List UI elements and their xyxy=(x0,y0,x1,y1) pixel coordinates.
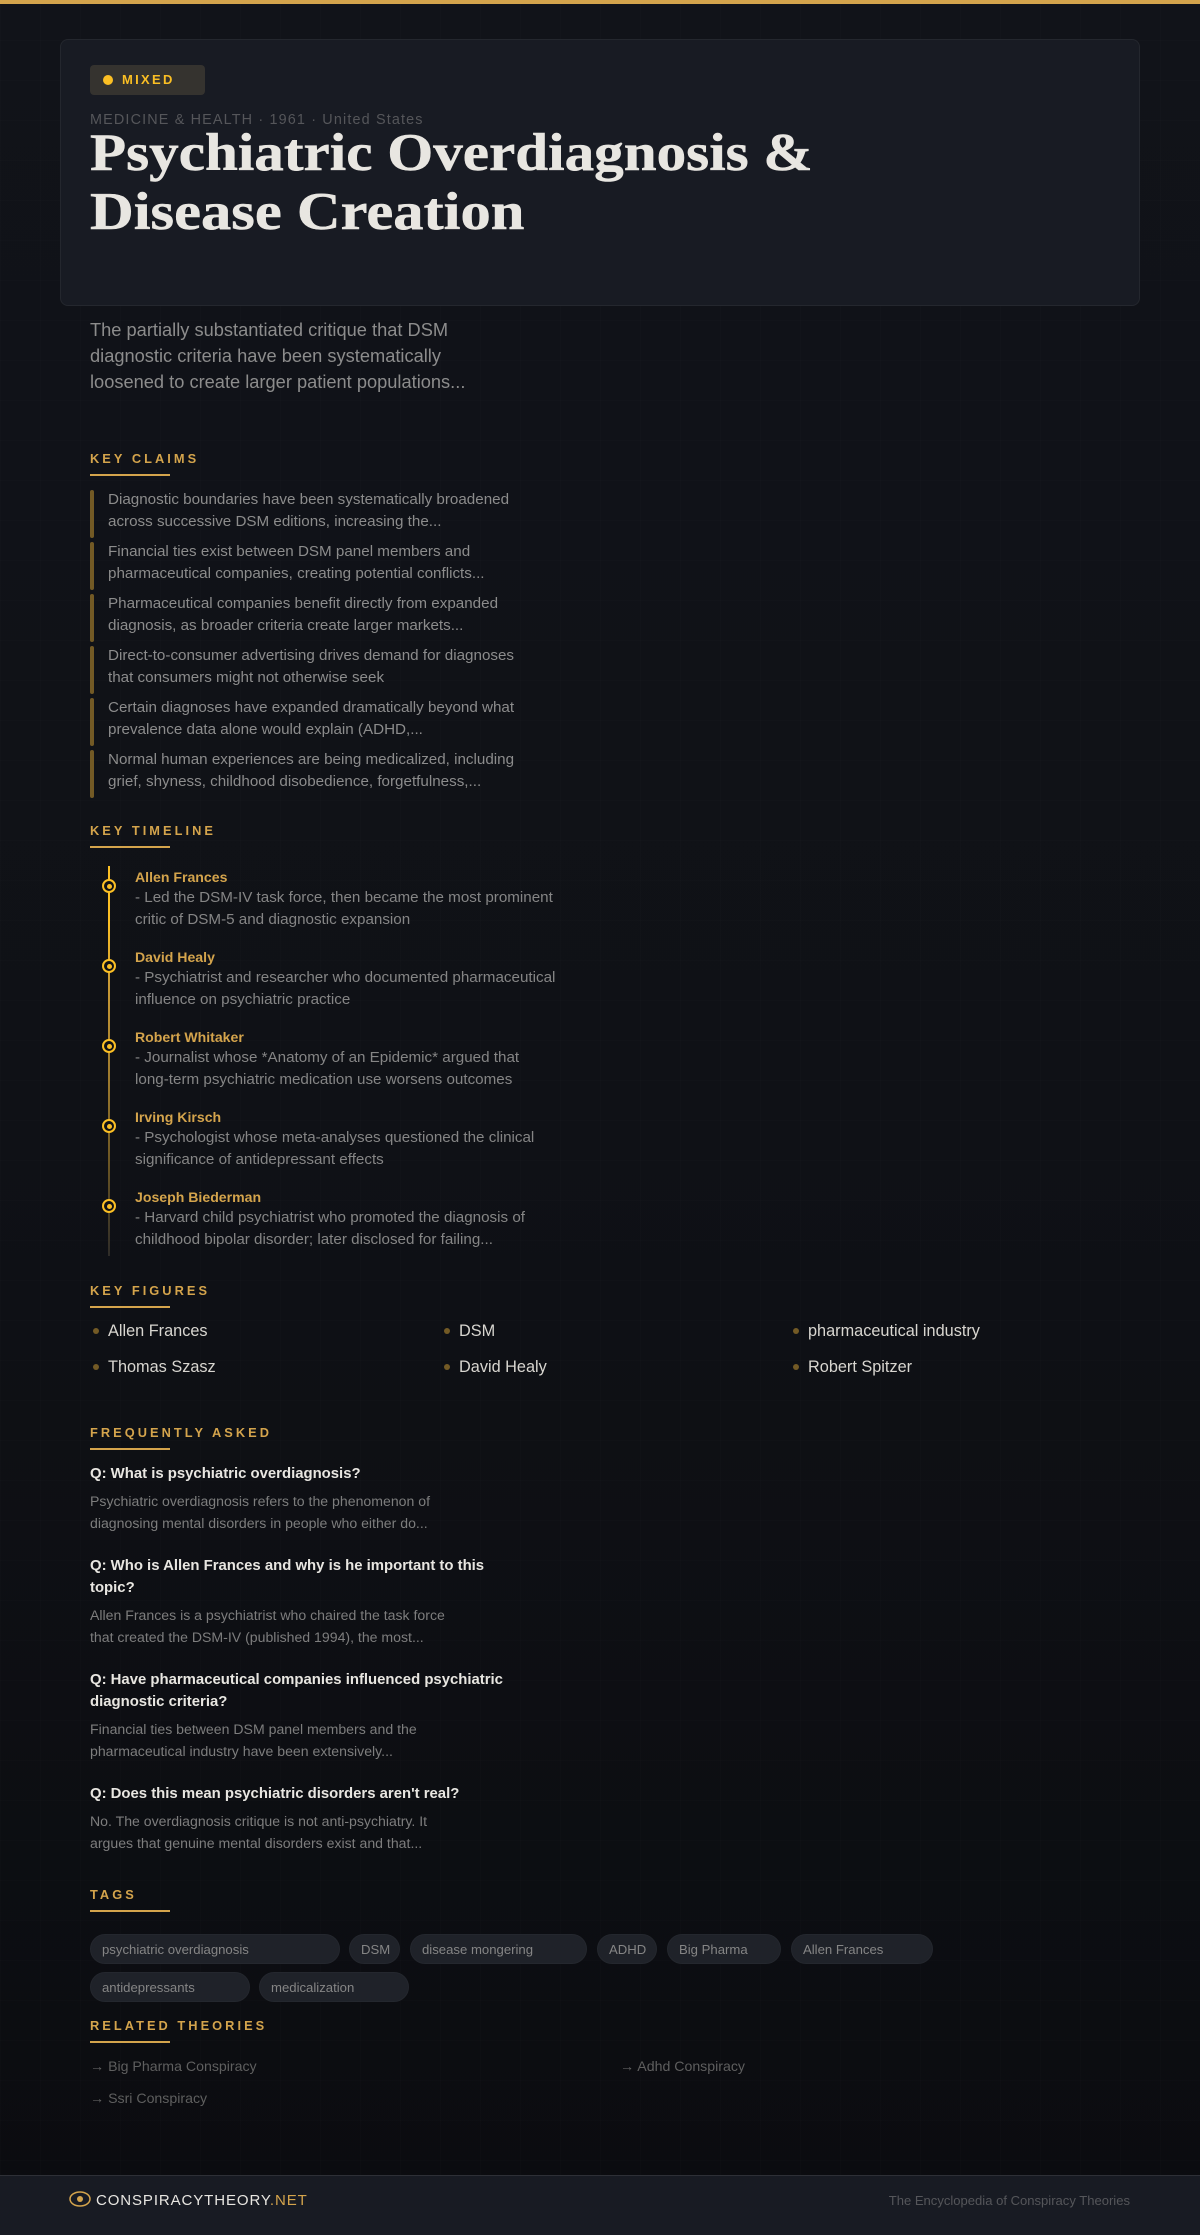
title: Psychiatric Overdiagnosis & xyxy=(90,124,813,182)
timeline entry 2: David Healy xyxy=(135,949,215,965)
tag: antidepressants xyxy=(102,1980,195,1995)
timeline entry 1: - Led the DSM-IV task force, then became the most prominent xyxy=(135,889,553,906)
intro summary: diagnostic criteria have been systematically xyxy=(90,345,441,366)
tag: Allen Frances xyxy=(803,1942,883,1957)
heading: key timeline: KEY TIMELINE xyxy=(90,823,216,838)
FAQ 2: that created the DSM-IV (published 1994), the most... xyxy=(90,1629,424,1645)
FAQ 4: No. The overdiagnosis critique is not anti-psychiatry. It xyxy=(90,1813,427,1829)
timeline entry 3: Robert Whitaker xyxy=(135,1029,244,1045)
heading: related theories: RELATED THEORIES xyxy=(90,2018,267,2033)
FAQ 4: argues that genuine mental disorders exist and that... xyxy=(90,1835,422,1851)
footer xyxy=(0,2175,1200,2235)
timeline entry 1: Allen Frances xyxy=(135,869,227,885)
FAQ 3 xyxy=(90,1672,503,1759)
title: Disease Creation xyxy=(90,182,524,240)
claim 2: Financial ties exist between DSM panel members and xyxy=(108,543,470,560)
timeline entry 1: critic of DSM-5 and diagnostic expansion xyxy=(135,911,410,928)
tag: ADHD xyxy=(609,1942,646,1957)
icon: eye logo xyxy=(69,2191,91,2207)
claim 2: pharmaceutical companies, creating potential conflicts... xyxy=(108,565,485,582)
FAQ 3: Q: Have pharmaceutical companies influenced psychiatric xyxy=(90,1672,503,1688)
logo wordmark: CONSPIRACYTHEORY.NET xyxy=(96,2192,308,2209)
timeline marker 4 xyxy=(102,1119,116,1133)
badge label: MIXED xyxy=(122,72,175,87)
timeline entry 4: significance of antidepressant effects xyxy=(135,1151,384,1168)
tag xyxy=(259,1972,409,2002)
timeline entry 5: - Harvard child psychiatrist who promoted the diagnosis of xyxy=(135,1209,525,1226)
tag xyxy=(410,1934,587,1964)
title xyxy=(90,124,813,240)
related link 3: → Ssri Conspiracy xyxy=(90,2090,207,2106)
FAQ 1: diagnosing mental disorders in people who either do... xyxy=(90,1515,428,1531)
heading: tags: TAGS xyxy=(90,1887,137,1902)
tag: psychiatric overdiagnosis xyxy=(102,1942,249,1957)
tag xyxy=(90,1934,340,1964)
related link 2: → Adhd Conspiracy xyxy=(620,2058,745,2074)
tag: medicalization xyxy=(271,1980,354,1995)
FAQ 4 xyxy=(90,1786,459,1851)
claim 6 xyxy=(90,749,540,797)
timeline marker 3 xyxy=(102,1039,116,1053)
timeline marker 2 xyxy=(102,959,116,973)
claim 4: Direct-to-consumer advertising drives demand for diagnoses xyxy=(108,647,514,664)
claim 1 xyxy=(90,489,540,537)
footer tagline: The Encyclopedia of Conspiracy Theories xyxy=(889,2193,1130,2208)
intro summary xyxy=(90,319,465,392)
claim 3: diagnosis, as broader criteria create larger markets... xyxy=(108,617,463,634)
FAQ 2 xyxy=(90,1558,484,1645)
FAQ 2: Q: Who is Allen Frances and why is he important to this xyxy=(90,1558,484,1574)
timeline entry 5: Joseph Biederman xyxy=(135,1189,261,1205)
timeline entry 2: influence on psychiatric practice xyxy=(135,991,350,1008)
badge: mixed verdict xyxy=(90,65,205,95)
tag: DSM xyxy=(361,1942,390,1957)
icon: badge dot xyxy=(103,75,113,85)
tag xyxy=(349,1934,400,1964)
claim 6: Normal human experiences are being medicalized, including xyxy=(108,751,514,768)
timeline entry 4: Irving Kirsch xyxy=(135,1109,221,1125)
claim 3: Pharmaceutical companies benefit directly from expanded xyxy=(108,595,498,612)
tag: disease mongering xyxy=(422,1942,533,1957)
timeline entry 2: - Psychiatrist and researcher who documented pharmaceutical xyxy=(135,969,555,986)
timeline entry 4: - Psychologist whose meta-analyses questioned the clinical xyxy=(135,1129,534,1146)
claim 5: prevalence data alone would explain (ADHD,... xyxy=(108,721,423,738)
timeline entry 5 xyxy=(135,1189,525,1248)
FAQ 4: Q: Does this mean psychiatric disorders aren't real? xyxy=(90,1786,459,1802)
FAQ 1 xyxy=(90,1466,430,1531)
figure: Allen Frances: Allen Frances xyxy=(108,1322,208,1340)
panel: key claims xyxy=(90,490,514,798)
FAQ 2: Allen Frances is a psychiatrist who chaired the task force xyxy=(90,1607,445,1623)
tag xyxy=(667,1934,781,1964)
FAQ 3: pharmaceutical industry have been extensively... xyxy=(90,1743,393,1759)
claim 3 xyxy=(90,593,540,641)
claim 2 xyxy=(90,541,540,589)
claim 6: grief, shyness, childhood disobedience, forgetfulness,... xyxy=(108,773,481,790)
tag: Big Pharma xyxy=(679,1942,748,1957)
heading: key figures: KEY FIGURES xyxy=(90,1283,210,1298)
category and date line: MEDICINE & HEALTH · 1961 · United States xyxy=(90,112,424,128)
FAQ 1: Psychiatric overdiagnosis refers to the phenomenon of xyxy=(90,1493,430,1509)
figure: Thomas Szasz: Thomas Szasz xyxy=(108,1358,216,1376)
timeline marker 1 xyxy=(102,879,116,893)
FAQ 3: Financial ties between DSM panel members and the xyxy=(90,1721,417,1737)
FAQ 3: diagnostic criteria? xyxy=(90,1694,227,1710)
timeline line xyxy=(108,866,110,1256)
panel: hero xyxy=(60,39,1140,306)
figure: David Healy: David Healy xyxy=(459,1358,547,1376)
intro summary: The partially substantiated critique that DSM xyxy=(90,319,448,340)
FAQ 2: topic? xyxy=(90,1580,135,1596)
figure: pharmaceutical industry: pharmaceutical industry xyxy=(808,1322,980,1340)
intro summary: loosened to create larger patient populations... xyxy=(90,371,465,392)
claim 1: Diagnostic boundaries have been systematically broadened xyxy=(108,491,509,508)
panel: timeline xyxy=(102,866,555,1256)
timeline entry 3: - Journalist whose *Anatomy of an Epidemic* argued that xyxy=(135,1049,519,1066)
timeline entry 3: long-term psychiatric medication use worsens outcomes xyxy=(135,1071,512,1088)
claim 1: across successive DSM editions, increasing the... xyxy=(108,513,441,530)
timeline entry 3 xyxy=(135,1029,519,1088)
panel: tags xyxy=(90,1934,933,2002)
claim 4 xyxy=(90,645,540,693)
heading: key claims: KEY CLAIMS xyxy=(90,451,199,466)
timeline entry 5: childhood bipolar disorder; later disclosed for failing... xyxy=(135,1231,493,1248)
timeline entry 4 xyxy=(135,1109,534,1168)
timeline marker 5 xyxy=(102,1199,116,1213)
timeline entry 2 xyxy=(135,949,555,1008)
claim 5: Certain diagnoses have expanded dramatically beyond what xyxy=(108,699,514,716)
tag xyxy=(791,1934,933,1964)
figure: Robert Spitzer: Robert Spitzer xyxy=(808,1358,912,1376)
related link 1: → Big Pharma Conspiracy xyxy=(90,2058,257,2074)
timeline entry 1 xyxy=(135,869,553,928)
panel: key figures xyxy=(93,1322,980,1376)
FAQ 1: Q: What is psychiatric overdiagnosis? xyxy=(90,1466,361,1482)
claim 5 xyxy=(90,697,540,745)
claim 4: that consumers might not otherwise seek xyxy=(108,669,384,686)
tag xyxy=(597,1934,657,1964)
heading: frequently asked: FREQUENTLY ASKED xyxy=(90,1425,272,1440)
tag xyxy=(90,1972,250,2002)
figure: DSM: DSM xyxy=(459,1322,495,1340)
